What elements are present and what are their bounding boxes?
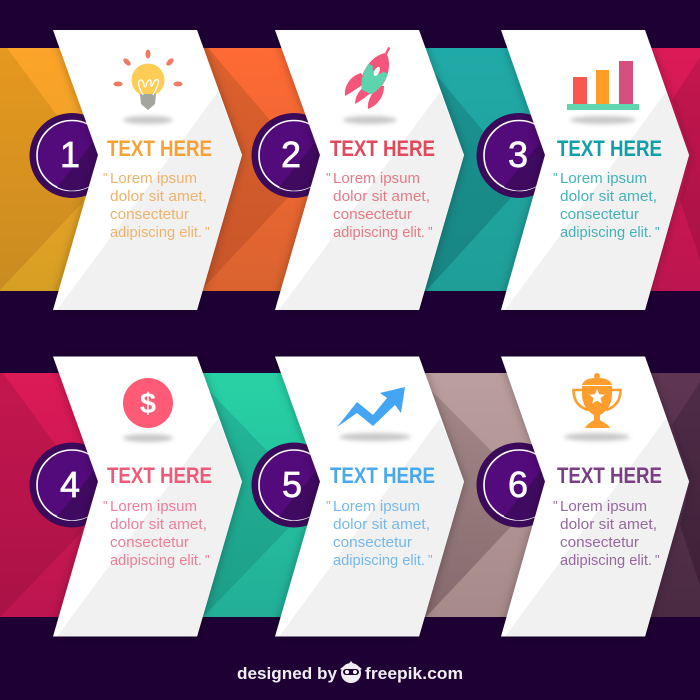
text block 1: dolor sit amet, xyxy=(110,189,207,205)
heading 2: TEXT HERE xyxy=(330,136,435,161)
text block 6: consectetur xyxy=(560,535,639,551)
footer credit xyxy=(237,661,463,683)
text block 6 xyxy=(553,498,660,569)
text block 4: " xyxy=(205,552,210,567)
icon: light bulb xyxy=(114,50,182,124)
number badge 3 xyxy=(476,113,562,198)
text block 1 xyxy=(103,170,210,241)
heading 1: TEXT HERE xyxy=(107,136,212,161)
text block 2: dolor sit amet, xyxy=(333,189,430,205)
text block 3: adipiscing elit. xyxy=(560,225,652,241)
arrow card 5 xyxy=(275,356,464,636)
text block 6: dolor sit amet, xyxy=(560,517,657,533)
icon: trend arrow xyxy=(337,387,411,441)
icon: trophy xyxy=(564,373,630,441)
number badge 6: 6 xyxy=(508,464,528,505)
number badge 4 xyxy=(30,442,114,528)
text block 4: consectetur xyxy=(110,535,189,551)
arrow card 3 xyxy=(501,30,689,310)
icon: dollar coin xyxy=(123,378,173,442)
icon: bar chart xyxy=(567,61,639,124)
panel 3 xyxy=(476,30,689,310)
text block 2: consectetur xyxy=(333,207,412,223)
icon: freepik logo xyxy=(340,661,362,683)
icon: rocket xyxy=(343,42,399,124)
number badge 2: 2 xyxy=(281,134,301,175)
heading 5: TEXT HERE xyxy=(330,463,435,488)
number badge 6 xyxy=(476,442,562,528)
text block 4 xyxy=(103,498,210,569)
text block 3: Lorem ipsum xyxy=(560,171,647,187)
arrow card 1 xyxy=(53,30,242,310)
arrow card 4 xyxy=(53,356,242,636)
bottom ribbon band xyxy=(0,373,700,617)
text block 3 xyxy=(553,170,660,241)
text block 4: adipiscing elit. xyxy=(110,553,202,569)
text block 4: Lorem ipsum xyxy=(110,499,197,515)
arrow card 2 xyxy=(275,30,464,310)
text block 4: " xyxy=(103,498,108,513)
text block 6: Lorem ipsum xyxy=(560,499,647,515)
text block 5: " xyxy=(326,498,331,513)
text block 1: " xyxy=(205,224,210,239)
text block 2: " xyxy=(326,170,331,185)
text block 4: dolor sit amet, xyxy=(110,517,207,533)
text block 2 xyxy=(326,170,433,241)
panel 1 xyxy=(30,30,242,310)
text block 3: " xyxy=(655,224,660,239)
text block 5: " xyxy=(428,552,433,567)
number badge 5: 5 xyxy=(282,464,302,505)
text block 1: Lorem ipsum xyxy=(110,171,197,187)
panel 4 xyxy=(30,356,242,636)
text block 1: adipiscing elit. xyxy=(110,225,202,241)
text block 3: " xyxy=(553,170,558,185)
text block 2: " xyxy=(428,224,433,239)
text block 1: consectetur xyxy=(110,207,189,223)
text block 3: dolor sit amet, xyxy=(560,189,657,205)
number badge 5 xyxy=(252,442,336,528)
heading 3: TEXT HERE xyxy=(557,136,662,161)
panel 6 xyxy=(476,356,689,636)
text block 6: " xyxy=(553,498,558,513)
number badge 3: 3 xyxy=(508,134,528,175)
number badge 1 xyxy=(30,113,114,198)
top ribbon band xyxy=(0,48,700,291)
text block 2: Lorem ipsum xyxy=(333,171,420,187)
text block 6: " xyxy=(655,552,660,567)
text block 1: " xyxy=(103,170,108,185)
text block 5: Lorem ipsum xyxy=(333,499,420,515)
footer credit: designed by xyxy=(237,664,338,683)
heading 4: TEXT HERE xyxy=(107,463,212,488)
number badge 1: 1 xyxy=(60,134,80,175)
number badge 2 xyxy=(252,113,336,198)
number badge 4: 4 xyxy=(60,464,80,505)
text block 6: adipiscing elit. xyxy=(560,553,652,569)
footer credit: freepik.com xyxy=(365,664,463,683)
text block 5: dolor sit amet, xyxy=(333,517,430,533)
text block 3: consectetur xyxy=(560,207,639,223)
arrow card 6 xyxy=(501,356,689,636)
text block 2: adipiscing elit. xyxy=(333,225,425,241)
text block 5: consectetur xyxy=(333,535,412,551)
text block 5: adipiscing elit. xyxy=(333,553,425,569)
panel 5 xyxy=(252,356,464,636)
icon: dollar coin: $ xyxy=(140,388,156,420)
text block 5 xyxy=(326,498,433,569)
panel 2 xyxy=(252,30,464,310)
heading 6: TEXT HERE xyxy=(557,463,662,488)
